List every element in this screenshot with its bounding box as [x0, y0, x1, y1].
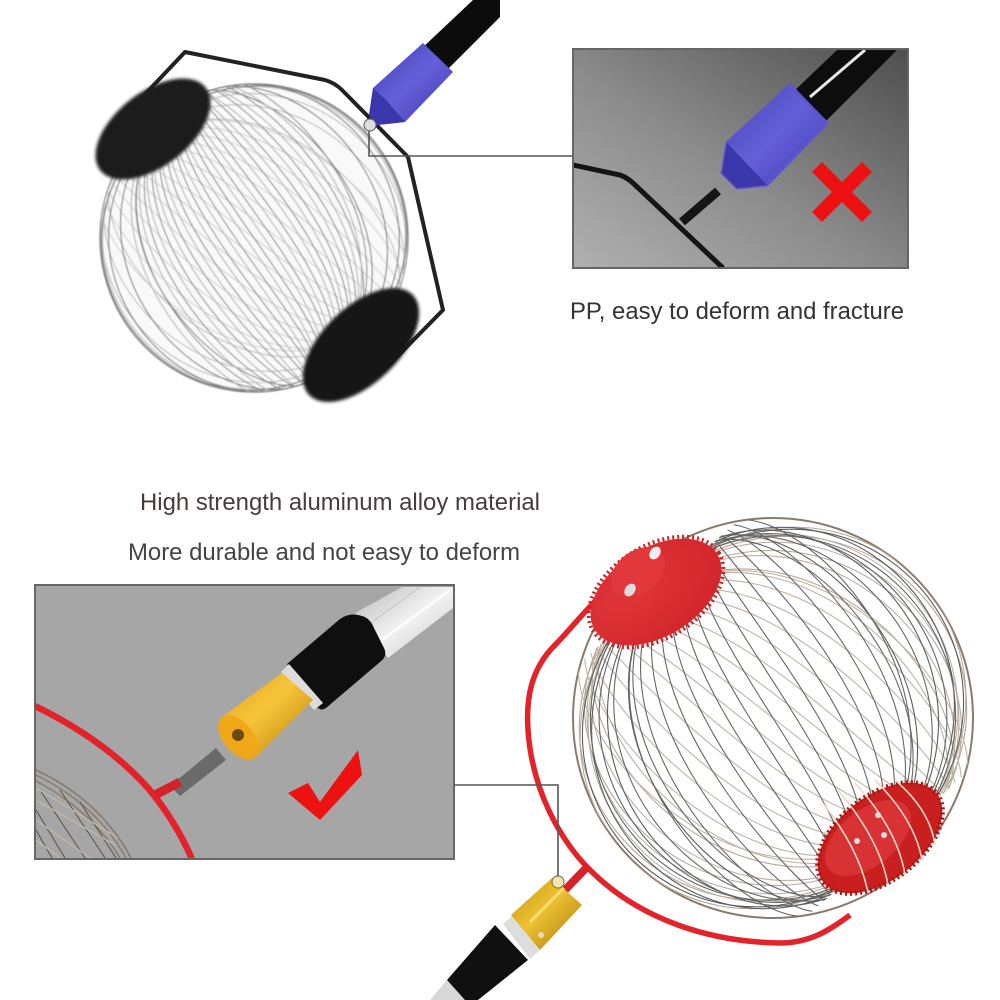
panel: aluminum connector close-up [35, 585, 454, 859]
red frame [35, 706, 192, 859]
product photo: black wire ball roller [92, 0, 500, 405]
silver knurl [503, 915, 540, 959]
wire ball fragment [36, 770, 131, 858]
callout line: bottom [454, 785, 564, 888]
silver pole [430, 980, 465, 1000]
red cross [817, 167, 867, 217]
red frame [528, 565, 850, 943]
black frame wire [573, 165, 723, 268]
threaded stub [682, 191, 718, 222]
caption: aluminum line two: More durable and not easy to deform [128, 539, 520, 566]
black handle [420, 0, 500, 72]
callout line: top [364, 119, 573, 156]
black end cap bottom [283, 268, 439, 422]
wire ball [98, 82, 410, 394]
gold connector [511, 878, 582, 950]
wire ball [572, 517, 974, 919]
silver pole [355, 587, 453, 658]
red cap top [569, 514, 743, 670]
red check mark [288, 750, 362, 820]
blue plastic connector [722, 85, 827, 188]
blue connector [369, 43, 453, 125]
product photo: red wire ball roller [430, 517, 974, 1000]
silver knurl [281, 664, 323, 710]
gold connector [218, 673, 313, 760]
black sleeve [447, 925, 528, 1000]
panel: PP connector close-up [573, 49, 908, 268]
black pole [796, 50, 897, 120]
black frame [133, 52, 443, 367]
caption: aluminum line one: High strength aluminum alloy material [140, 489, 540, 516]
black end cap top [77, 59, 229, 199]
red cap bottom [797, 761, 963, 915]
caption: PP: PP, easy to deform and fracture [570, 298, 904, 325]
black sleeve [287, 615, 385, 709]
threaded stud [170, 748, 226, 796]
